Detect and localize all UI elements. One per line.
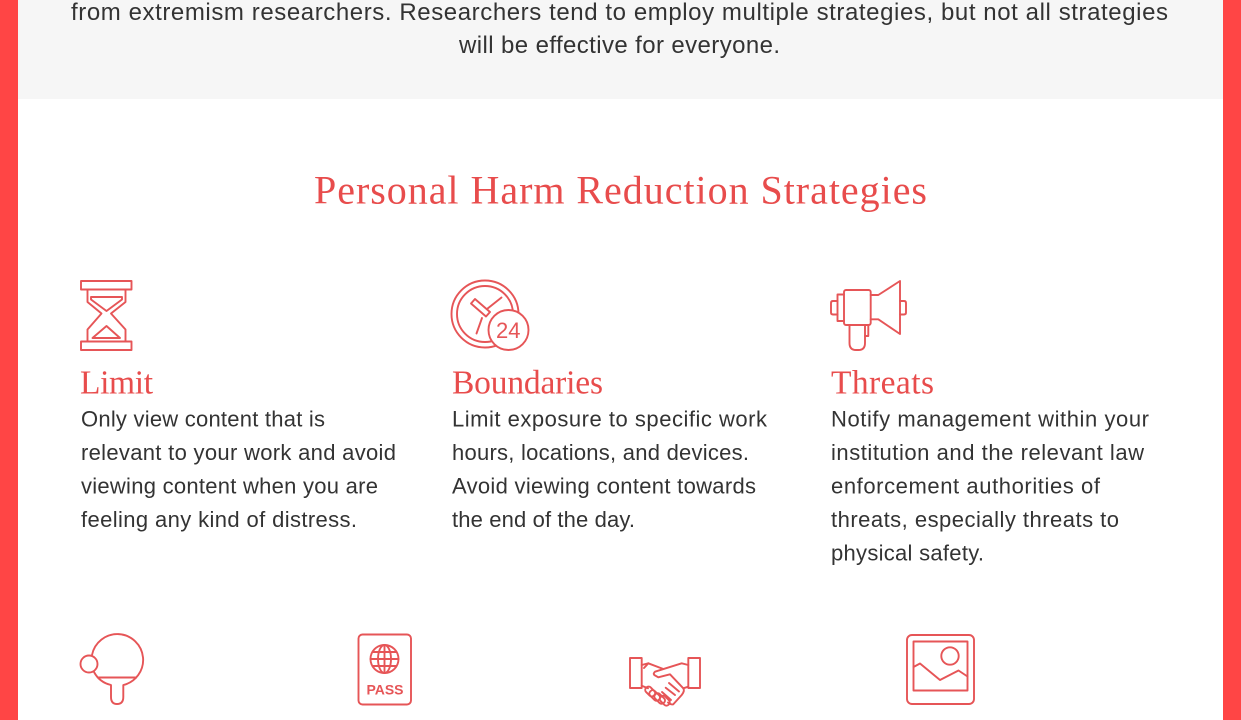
text: boundaries description: the end of the day. bbox=[452, 507, 635, 532]
heading: limit: Limit bbox=[80, 364, 154, 402]
intro panel: will be effective for everyone. bbox=[458, 32, 780, 59]
text: limit description: feeling any kind of distress. bbox=[81, 507, 357, 532]
text: boundaries description: Limit exposure to specific work bbox=[452, 406, 768, 432]
text: boundaries description: hours, locations, and devices. bbox=[452, 440, 749, 465]
text: threats description: physical safety. bbox=[831, 540, 984, 566]
icon: megaphone bbox=[831, 281, 906, 350]
left red border bbox=[0, 0, 18, 720]
intro panel bbox=[18, 0, 1223, 99]
text: boundaries description bbox=[452, 406, 768, 532]
icon: passport: PASS bbox=[366, 682, 404, 698]
text: threats description: Notify management within your bbox=[831, 406, 1149, 432]
text: boundaries description: Avoid viewing content towards bbox=[452, 474, 756, 498]
heading: threats: Threats bbox=[831, 364, 934, 402]
heading: boundaries: Boundaries bbox=[452, 364, 603, 402]
strategy: limit bbox=[80, 281, 396, 532]
icon: handshake bbox=[630, 658, 700, 707]
text: limit description: viewing content when you are bbox=[81, 474, 378, 498]
text: threats description: threats, especially threats to bbox=[831, 507, 1119, 532]
text: limit description: relevant to your work and avoid bbox=[81, 440, 396, 465]
icon: hourglass bbox=[81, 281, 132, 350]
right red border bbox=[1223, 0, 1241, 720]
strategy: boundaries bbox=[452, 280, 768, 532]
text: threats description: enforcement authorities of bbox=[831, 474, 1101, 498]
title: Personal Harm Reduction Strategies bbox=[314, 168, 927, 212]
icon: ping pong paddle bbox=[80, 634, 143, 704]
icon: 24 hour clock bbox=[452, 280, 528, 350]
text: threats description: institution and the relevant law bbox=[831, 440, 1144, 465]
strategy: threats bbox=[831, 281, 1149, 566]
text: limit description: Only view content that is bbox=[81, 406, 325, 432]
text: limit description bbox=[81, 406, 396, 532]
icon: 24 hour clock: 24 bbox=[496, 318, 520, 343]
text: threats description bbox=[831, 406, 1149, 566]
icon: image bbox=[907, 635, 974, 704]
icon: passport bbox=[358, 634, 411, 704]
